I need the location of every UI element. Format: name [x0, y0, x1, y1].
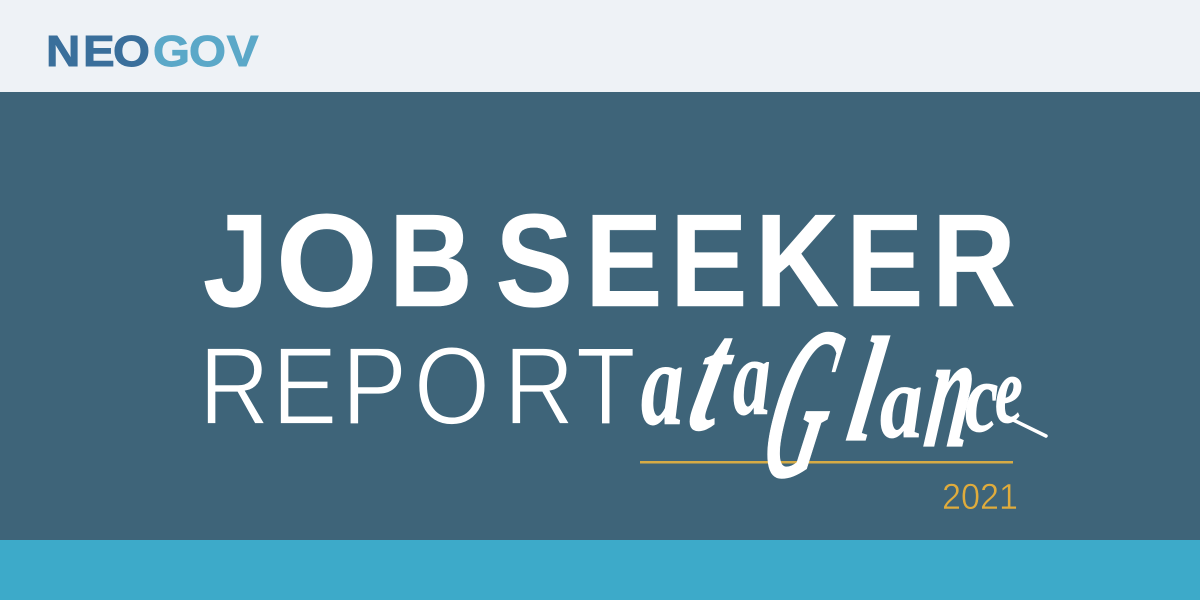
script title: at a Glance: e [995, 339, 1023, 443]
script title: at a Glance: G [744, 284, 863, 524]
year: 2021: 2021 [942, 476, 1018, 517]
heading: JOB SEEKER: J [203, 186, 269, 334]
panel: bottom accent band [0, 540, 1200, 600]
script title: at a Glance [641, 284, 1046, 524]
script title: at a Glance: a [733, 317, 770, 439]
heading: REPORT: REPORT [199, 326, 636, 448]
panel: top logo band [0, 0, 1200, 92]
logo: NEOGOV wordmark: GOV [153, 27, 259, 76]
script title: at a Glance: l [838, 306, 896, 473]
logo: NEOGOV wordmark: NEO [46, 27, 150, 76]
panel: main title background [0, 92, 1200, 540]
script title: at a Glance: t [675, 287, 751, 464]
divider line: gold rule [640, 461, 1013, 464]
heading: JOB SEEKER: O [276, 186, 378, 334]
script title: at a Glance: a [880, 344, 923, 460]
script title: at a Glance: c [965, 343, 998, 454]
heading: JOB SEEKER: B SEEKER [389, 187, 1016, 335]
script title: at a Glance: a [641, 318, 683, 451]
script title: at a Glance: n [917, 301, 987, 483]
